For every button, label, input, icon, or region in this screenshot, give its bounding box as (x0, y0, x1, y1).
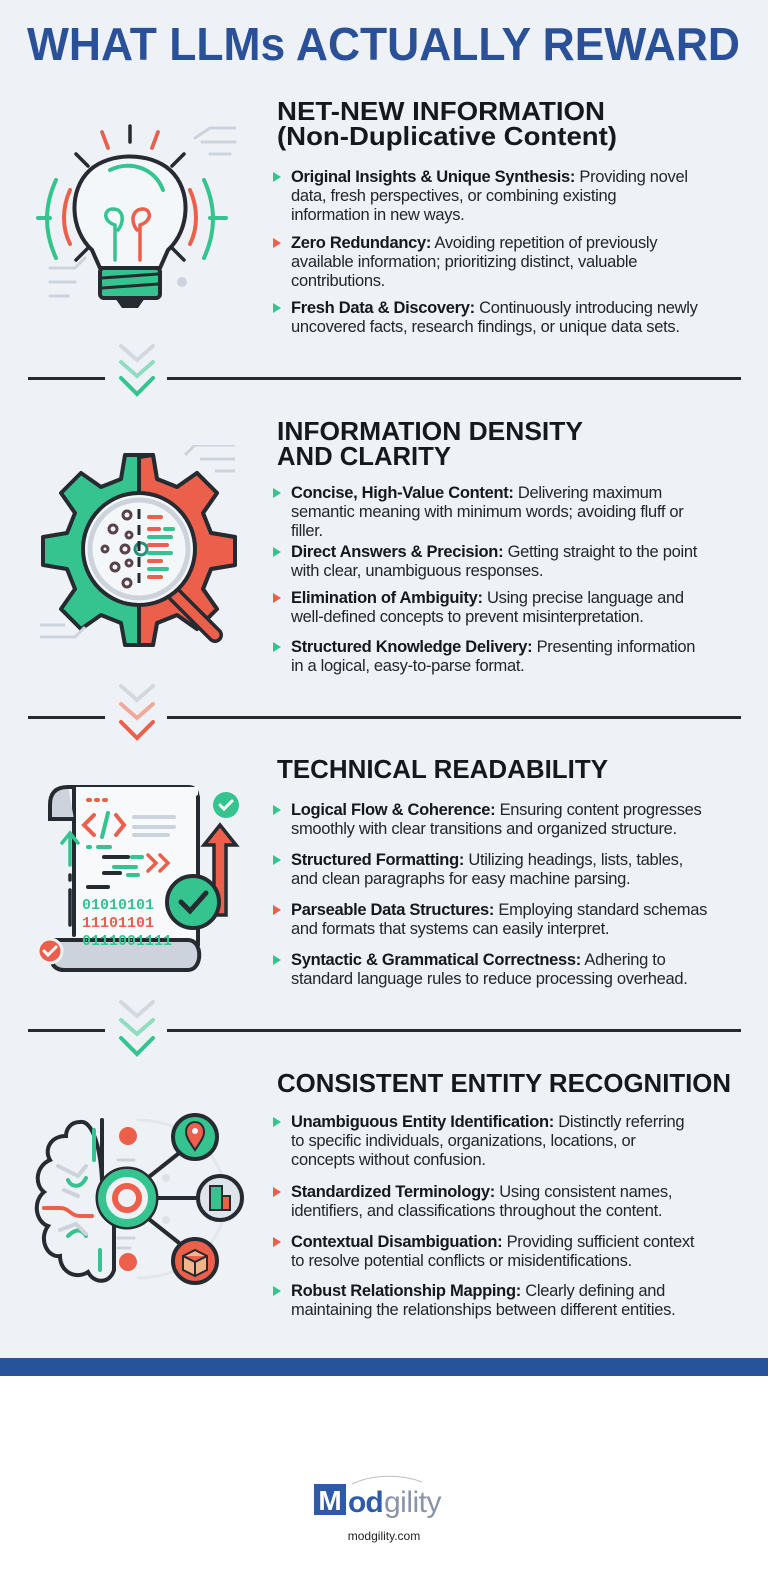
heading: information density: AND CLARITY (277, 441, 451, 471)
bullet: structured knowledge: in a logical, easy-to-parse format. (291, 657, 524, 675)
heading: information density (277, 416, 583, 471)
bullet: fresh data: Fresh Data & Discovery: Continuously introducing newly (291, 299, 698, 317)
heading: net-new information (277, 96, 617, 151)
bullet: unambiguous entity: Unambiguous Entity Identification: Distinctly referring (291, 1113, 684, 1131)
icon: lightbulb (36, 124, 236, 308)
bullet: structured formatting: Structured Formatting: Utilizing headings, lists, tables, (291, 851, 683, 869)
bullet: original insights: information in new ways. (291, 206, 464, 224)
bullet: logical flow: smoothly with clear transitions and organized structure. (291, 820, 677, 838)
bullet: direct answers: with clear, unambiguous responses. (291, 562, 543, 580)
bullet: zero redundancy: available information; prioritizing distinct, valuable (291, 253, 637, 271)
bullet: concise: semantic meaning with minimum words; avoiding fluff or (291, 503, 684, 521)
heading: net-new information: NET-NEW INFORMATION (277, 96, 605, 126)
bullet: syntactic correctness: standard language rules to reduce processing overhead. (291, 970, 688, 988)
icon: brain entity network (34, 1113, 244, 1285)
bullet: parseable data: and formats that systems can easily interpret. (291, 920, 609, 938)
divider 2 with chevrons (28, 684, 741, 741)
icon: code document: 11101101 (82, 915, 154, 932)
bullet: contextual disambiguation: to resolve potential conflicts or misidentifications. (291, 1252, 632, 1270)
bullet: zero redundancy: Zero Redundancy: Avoiding repetition of previously (291, 234, 657, 252)
bullet: fresh data: uncovered facts, research findings, or unique data sets. (291, 318, 680, 336)
icon: code document: 0111001111 (82, 933, 172, 950)
bullet: structured formatting: and clean paragraphs for easy machine parsing. (291, 870, 630, 888)
bullet: elimination of ambiguity (273, 589, 684, 626)
bullet: contextual disambiguation (273, 1233, 694, 1270)
icon: code document: 01010101 (82, 897, 154, 914)
bullet: zero redundancy (273, 234, 658, 290)
bullet: parseable data (273, 901, 707, 938)
bullet: structured knowledge: Structured Knowledge Delivery: Presenting information (291, 638, 695, 656)
bullet: parseable data: Parseable Data Structures: Employing standard schemas (291, 901, 707, 919)
bullet: relationship mapping: Robust Relationship Mapping: Clearly defining and (291, 1282, 665, 1300)
bullet: contextual disambiguation: Contextual Disambiguation: Providing sufficient context (291, 1233, 694, 1251)
url: modgility.com (348, 1529, 420, 1543)
bullet: original insights (273, 168, 688, 224)
heading: net-new information: (Non-Duplicative Content) (277, 121, 617, 151)
bullet: elimination of ambiguity: well-defined concepts to prevent misinterpretation. (291, 608, 643, 626)
bullet: direct answers (273, 543, 698, 580)
icon: gear with magnifier (40, 445, 237, 647)
bullet: logical flow: Logical Flow & Coherence: Ensuring content progresses (291, 801, 702, 819)
divider 3 with chevrons (28, 1000, 741, 1057)
bullet: elimination of ambiguity: Elimination of Ambiguity: Using precise language and (291, 589, 684, 607)
bullet: unambiguous entity: concepts without confusion. (291, 1151, 486, 1169)
bullet: structured formatting (273, 851, 683, 888)
divider 1 with chevrons (28, 344, 741, 397)
bullet: standardized terminology (273, 1183, 672, 1220)
logo: modgility (314, 1476, 442, 1518)
bullet: standardized terminology: Standardized Terminology: Using consistent names, (291, 1183, 672, 1201)
bullet: unambiguous entity: to specific individuals, organizations, locations, or (291, 1132, 636, 1150)
icon: code document (40, 785, 240, 972)
bullet: concise (273, 484, 684, 540)
bullet: relationship mapping: maintaining the relationships between different entities. (291, 1301, 675, 1319)
heading: information density: INFORMATION DENSITY (277, 416, 583, 446)
footer bar (0, 1358, 768, 1376)
bullet: original insights: Original Insights & Unique Synthesis: Providing novel (291, 168, 688, 186)
bullet: logical flow (273, 801, 702, 838)
logo: modgility: M (318, 1485, 342, 1516)
bullet: concise: filler. (291, 522, 323, 540)
heading: consistent entity recognition: CONSISTENT ENTITY RECOGNITION (277, 1068, 731, 1098)
bullet: relationship mapping (273, 1282, 675, 1319)
bullet: unambiguous entity (273, 1113, 684, 1169)
bullet: concise: Concise, High-Value Content: Delivering maximum (291, 484, 662, 502)
bullet: direct answers: Direct Answers & Precision: Getting straight to the point (291, 543, 697, 561)
bullet: standardized terminology: identifiers, and classifications throughout the content. (291, 1202, 662, 1220)
heading: technical readability: TECHNICAL READABILITY (277, 754, 608, 784)
title: WHAT LLMs ACTUALLY REWARD (27, 18, 740, 70)
bullet: structured knowledge (273, 638, 695, 675)
bullet: fresh data (273, 299, 698, 336)
bullet: original insights: data, fresh perspectives, or combining existing (291, 187, 616, 205)
bullet: syntactic correctness: Syntactic & Grammatical Correctness: Adhering to (291, 951, 665, 969)
bullet: syntactic correctness (273, 951, 688, 988)
bullet: zero redundancy: contributions. (291, 272, 385, 290)
